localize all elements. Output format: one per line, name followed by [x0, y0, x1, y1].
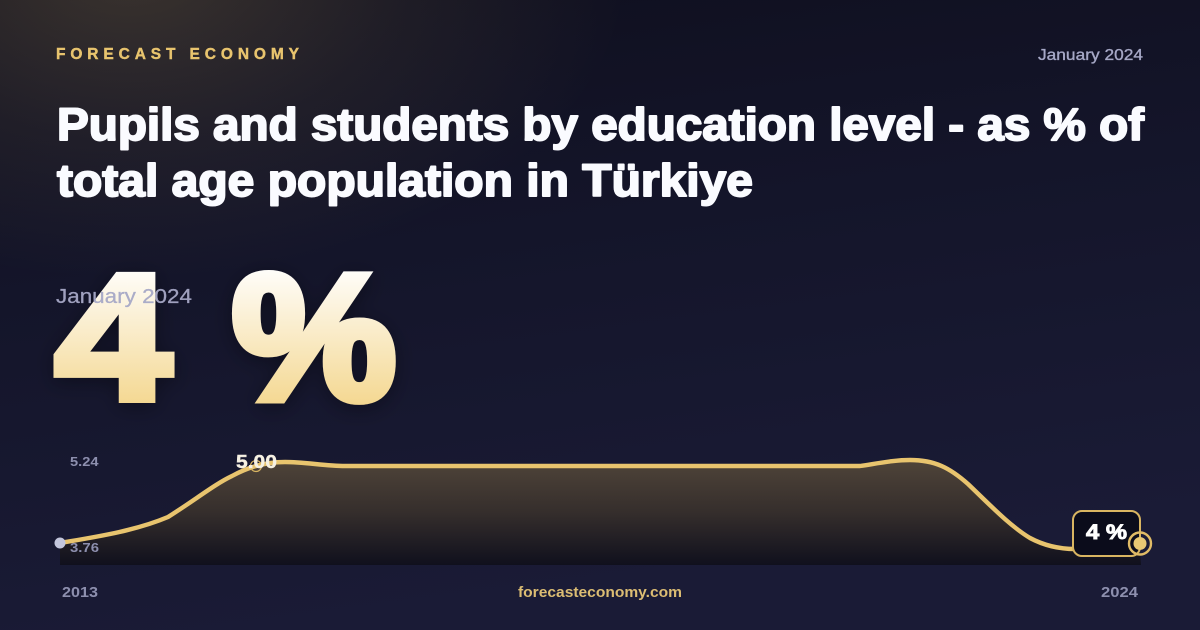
chart line: [60, 460, 1075, 549]
chart area fill: [60, 460, 1141, 565]
axis max label: 5.24: [70, 454, 99, 469]
title: total age population in Türkiye: [57, 155, 753, 206]
title: Pupils and students by education level - as % of: [57, 99, 1145, 150]
source url: forecasteconomy.com: [518, 584, 682, 601]
peak value: 5.00: [236, 452, 277, 472]
date top right: January 2024: [1038, 47, 1143, 64]
title: [57, 99, 1145, 206]
peak marker: [250, 460, 262, 472]
end year: 2024: [1101, 584, 1139, 601]
big value: %: [232, 237, 396, 437]
big value: 4: [55, 237, 171, 437]
end marker: [1129, 532, 1151, 554]
brand label: FORECAST ECONOMY: [56, 46, 300, 63]
current value callout: 4 %: [1086, 521, 1127, 544]
current value callout: [1073, 511, 1140, 556]
start point: [54, 538, 66, 548]
big value: [55, 237, 396, 437]
area chart: [54, 452, 1151, 565]
start year: 2013: [62, 584, 98, 601]
date under title: January 2024: [56, 286, 192, 308]
axis min label: 3.76: [70, 540, 99, 555]
